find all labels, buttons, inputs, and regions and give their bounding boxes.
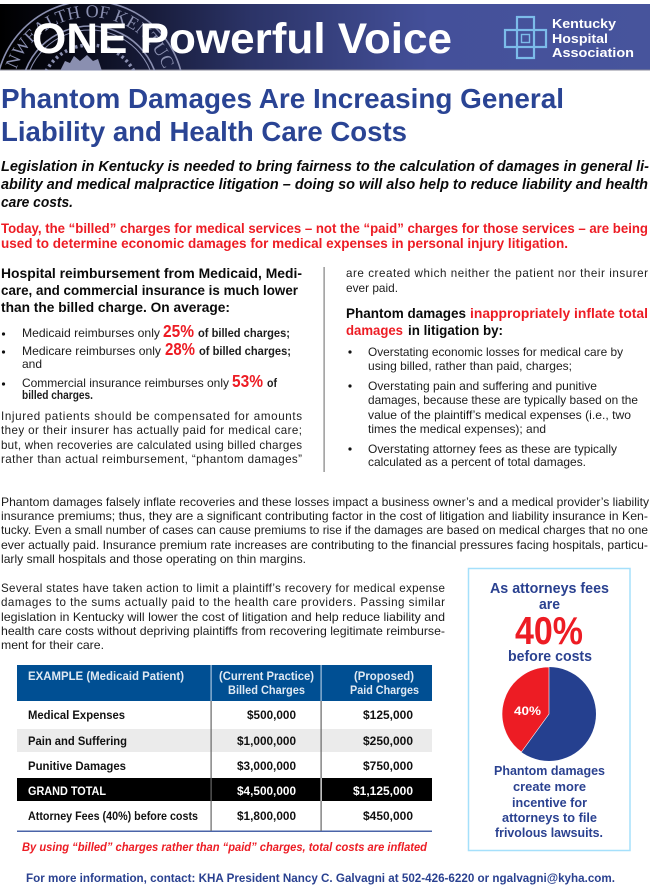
row: medical expenses: $125,000 — [363, 709, 413, 722]
phantom damages bullets: Overstating attorney fees as these are typically — [368, 443, 617, 456]
big 40 percent: 40% — [515, 610, 583, 653]
body paragraph: premiums: ever actually paid. Insurance premium rate increases are contributing to the financial pressures facing hospitals, particu- — [1, 539, 648, 552]
phantom damages heading: Phantom damages — [346, 305, 466, 321]
body paragraph: other states: ment for their care. — [1, 639, 104, 652]
callout message: incentive for — [512, 795, 587, 810]
row: grand total: GRAND TOTAL — [28, 785, 106, 798]
callout heading — [490, 581, 609, 613]
table header: (Current Practice) — [219, 670, 314, 683]
continued paragraph: ever paid. — [346, 282, 398, 295]
injured patients paragraph — [1, 410, 302, 466]
reimbursement bullets: of billed charges; — [198, 327, 290, 340]
reimbursement bullets: Medicare reimburses only — [22, 345, 161, 358]
row: medical expenses: Medical Expenses — [28, 709, 125, 722]
reimbursement bullets: Commercial insurance reimburses only — [22, 377, 229, 390]
injured patients paragraph: Injured patients should be compensated for amounts — [1, 410, 302, 423]
phantom damages bullets: calculated as a percent of total damages. — [368, 456, 586, 469]
injured patients paragraph: rather than actual reimbursement, “phantom damages” — [1, 453, 302, 466]
callout message: Phantom damages — [494, 763, 605, 778]
callout message: frivolous lawsuits. — [495, 825, 603, 840]
row: punitive damages — [28, 760, 413, 773]
panel: attorney fees callout — [468, 568, 630, 850]
reimbursement bullets: of — [267, 377, 277, 390]
KHA wordmark: Association — [552, 45, 634, 60]
icon: KHA cross logo — [505, 17, 546, 58]
row: attorney fees: Attorney Fees (40%) before costs — [28, 810, 198, 823]
row: grand total — [28, 785, 413, 798]
phantom damages bullets — [348, 346, 638, 469]
icon: state seal: NWEALTH OF KENTUC — [6, 5, 174, 70]
body paragraph: premiums: insurance premiums; thus, they are a significant contributing factor in the cost of litigation and liability insurance in Ken- — [1, 510, 648, 523]
body paragraph: other states: legislation in Kentucky will lower the cost of litigation and help reduce liability and — [1, 611, 445, 624]
phantom damages heading: in litigation by: — [408, 322, 503, 338]
callout message: attorneys to file — [502, 810, 597, 825]
body paragraph: other states — [1, 582, 445, 652]
phantom damages heading — [346, 305, 648, 338]
injured patients paragraph: they or their insurer has actually paid for medical care; — [1, 424, 302, 437]
phantom damages bullets: using billed, rather than paid, charges; — [368, 360, 572, 373]
row: medical expenses: $500,000 — [247, 709, 296, 722]
continued paragraph — [346, 267, 648, 295]
reimbursement bullets: Medicaid reimburses only — [22, 327, 160, 340]
header banner — [0, 4, 650, 70]
callout message — [494, 763, 605, 840]
table header: EXAMPLE (Medicaid Patient) — [28, 670, 184, 683]
KHA wordmark: Hospital — [552, 31, 608, 46]
KHA wordmark — [552, 16, 634, 60]
phantom damages heading: damages — [346, 322, 403, 338]
reimbursement bullets: 25% — [163, 321, 194, 341]
reimbursement bullets: of billed charges; — [199, 345, 291, 358]
callout message: create more — [513, 779, 586, 794]
reimbursement heading — [1, 265, 302, 315]
table header: Billed Charges — [228, 684, 305, 697]
intro statement — [1, 159, 649, 211]
body paragraph: other states: damages to the sums actually paid to the health care providers. Passing similar — [1, 596, 445, 609]
intro statement: care costs. — [1, 195, 73, 211]
banner title: ONE Powerful Voice — [32, 15, 452, 63]
red statement: Today, the “billed” charges for medical services – not the “paid” charges for those services – are being — [1, 221, 648, 236]
contact footer: For more information, contact: KHA President Nancy C. Galvagni at 502-426-6220 or ngalvagni@kyha.com. — [26, 872, 615, 885]
callout heading: As attorneys fees — [490, 581, 609, 597]
body paragraph: other states: health care costs without depriving plaintiffs from recovering legitimate reimburse- — [1, 625, 445, 638]
row: pain and suffering: Pain and Suffering — [28, 735, 127, 748]
KHA wordmark: Kentucky — [552, 16, 617, 31]
row: attorney fees: $1,800,000 — [237, 810, 296, 823]
right column — [346, 267, 648, 469]
reimbursement heading: than the billed charge. On average: — [1, 299, 230, 315]
row: attorney fees: $450,000 — [363, 810, 413, 823]
row: medical expenses — [28, 709, 413, 722]
pie chart: 40 percent: 40% — [514, 705, 541, 718]
reimbursement bullets — [2, 321, 291, 402]
red statement: used to determine economic damages for medical expenses in personal injury litigation. — [1, 236, 568, 251]
phantom damages bullets: times the medical expenses); and — [368, 423, 546, 436]
main title: Phantom Damages Are Increasing General — [1, 83, 564, 114]
left column — [1, 265, 302, 466]
phantom damages bullets: damages, because these are typically based on the — [368, 394, 638, 407]
row: attorney fees — [28, 810, 413, 823]
reimbursement bullets: 28% — [165, 339, 195, 359]
phantom damages heading: inappropriately inflate total — [470, 305, 648, 321]
continued paragraph: are created which neither the patient nor their insurer — [346, 267, 648, 280]
pie chart: 40 percent — [502, 667, 596, 761]
intro statement: Legislation in Kentucky is needed to bring fairness to the calculation of damages in general li- — [1, 159, 649, 175]
row: punitive damages: $750,000 — [363, 760, 413, 773]
before costs: before costs — [508, 649, 592, 665]
phantom damages bullets: value of the plaintiff’s medical expenses (i.e., two — [368, 409, 631, 422]
callout heading: are — [539, 597, 560, 613]
table header: (Proposed) — [354, 670, 414, 683]
table header: Paid Charges — [350, 684, 419, 697]
row: grand total: $1,125,000 — [353, 785, 413, 798]
reimbursement bullets: billed charges. — [22, 389, 93, 402]
row: pain and suffering: $250,000 — [363, 735, 413, 748]
intro statement: ability and medical malpractice litigation – doing so will also help to reduce liability and health — [1, 177, 648, 193]
reimbursement bullets: 53% — [232, 371, 263, 391]
row: grand total: $4,500,000 — [237, 785, 296, 798]
phantom damages bullets: Overstating economic losses for medical care by — [368, 346, 623, 359]
row: pain and suffering: $1,000,000 — [237, 735, 296, 748]
reimbursement bullets: and — [22, 358, 42, 371]
row: punitive damages: $3,000,000 — [237, 760, 296, 773]
row: punitive damages: Punitive Damages — [28, 760, 126, 773]
row: pain and suffering — [28, 735, 413, 748]
body paragraph: premiums: larly small hospitals and those operating on thin margins. — [1, 553, 306, 566]
comparison table — [17, 665, 432, 832]
table header — [28, 670, 419, 697]
injured patients paragraph: but, when recoveries are calculated using billed charges — [1, 439, 302, 452]
table caption: By using “billed” charges rather than “paid” charges, total costs are inflated — [22, 840, 427, 854]
body paragraph: premiums: tucky. Even a small number of cases can cause premiums to rise if the damages are based on medical charges that no one — [1, 524, 648, 537]
red statement — [1, 221, 648, 251]
main title — [1, 83, 564, 147]
body paragraph: other states: Several states have taken action to limit a plaintiff’s recovery for medical expense — [1, 582, 445, 595]
main title: Liability and Health Care Costs — [1, 116, 407, 147]
phantom damages bullets: Overstating pain and suffering and punitive — [368, 380, 597, 393]
body paragraph: premiums — [1, 496, 649, 566]
reimbursement heading: care, and commercial insurance is much lower — [1, 282, 299, 298]
reimbursement heading: Hospital reimbursement from Medicaid, Medi- — [1, 265, 302, 281]
body paragraph: premiums: Phantom damages falsely inflate recoveries and these losses impact a business owner’s and a medical provider’s liability — [1, 496, 649, 509]
